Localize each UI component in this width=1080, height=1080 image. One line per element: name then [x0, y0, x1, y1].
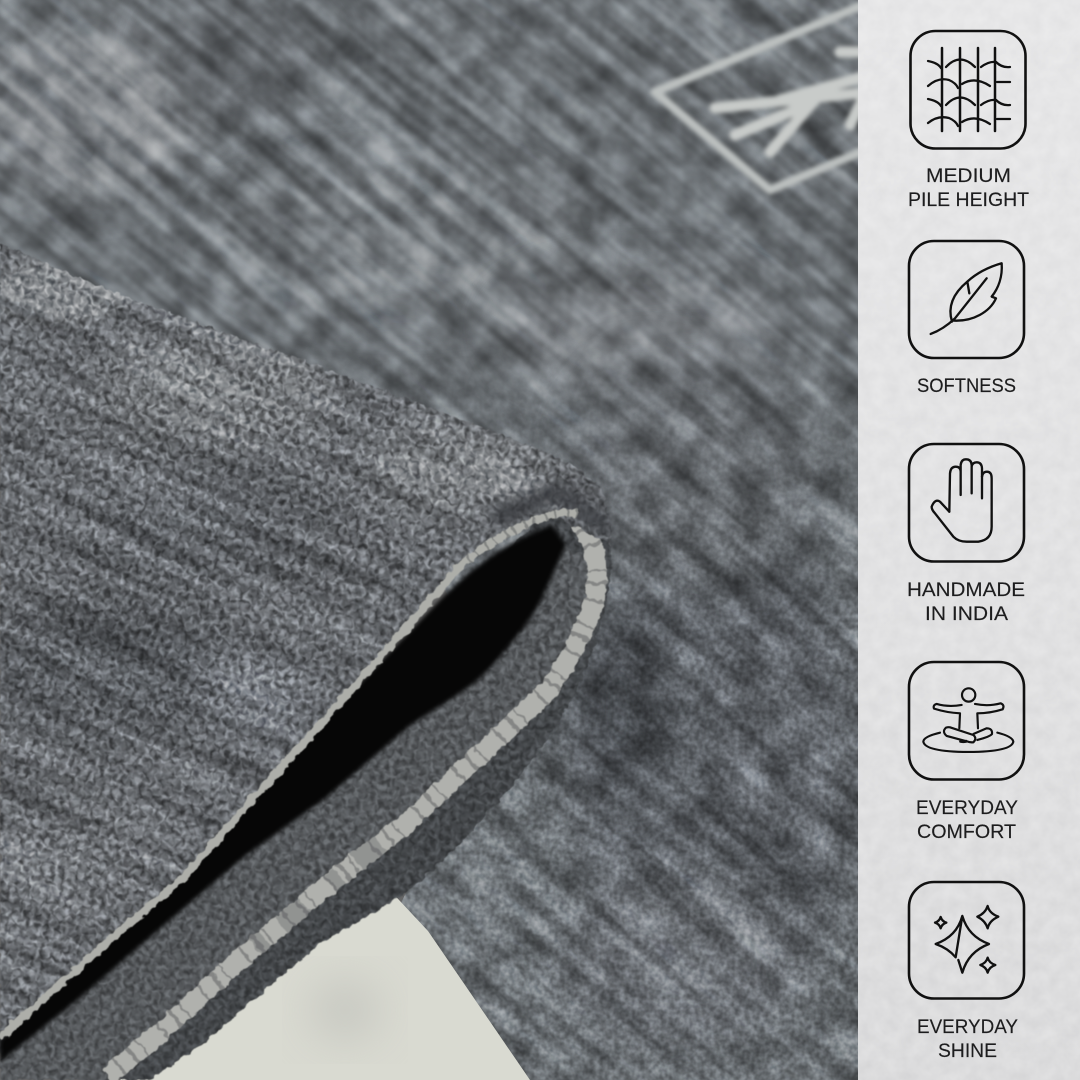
panel background: [858, 0, 1080, 1080]
feature: everyday comfort: [909, 662, 1024, 843]
label: everyday shine: SHINE: [938, 1041, 997, 1062]
icon: seated meditation figure: [909, 662, 1024, 780]
label: medium pile height: MEDIUM: [926, 166, 1011, 187]
label: handmade in india: HANDMADE: [907, 580, 1025, 601]
label: medium pile height: [908, 166, 1029, 211]
light edge of top fold: [0, 512, 578, 1038]
label: softness: SOFTNESS: [917, 376, 1016, 397]
icon: open hand: [909, 444, 1024, 562]
feature: everyday shine: [909, 882, 1024, 1062]
dark cavity inside fold: [0, 525, 566, 1062]
label: handmade in india: IN INDIA: [925, 604, 1008, 625]
label: everyday shine: [917, 1017, 1018, 1062]
label: everyday shine: EVERYDAY: [917, 1017, 1018, 1038]
panel: feature list: [858, 0, 1080, 1080]
lower rug layer under fold: [0, 500, 640, 1080]
cream rug section at bottom: [120, 885, 530, 1080]
rope binding along lower edge: [108, 518, 597, 1076]
label: medium pile height: PILE HEIGHT: [908, 190, 1029, 211]
icon: sparkles: [909, 882, 1024, 998]
icon: feather: [909, 241, 1024, 358]
label: everyday comfort: COMFORT: [917, 822, 1016, 843]
dark shadow at fold lip: [490, 492, 612, 530]
feature: medium pile height: [908, 31, 1029, 211]
printed diamond motif on rug: [655, 2, 870, 190]
top fold of rug: [0, 230, 640, 1060]
feature: handmade in india: [907, 444, 1025, 625]
label: handmade in india: [907, 580, 1025, 625]
label: everyday comfort: EVERYDAY: [916, 798, 1018, 819]
icon: woven pile: [910, 31, 1026, 148]
label: everyday comfort: [916, 798, 1018, 843]
feature: softness: [909, 241, 1024, 397]
